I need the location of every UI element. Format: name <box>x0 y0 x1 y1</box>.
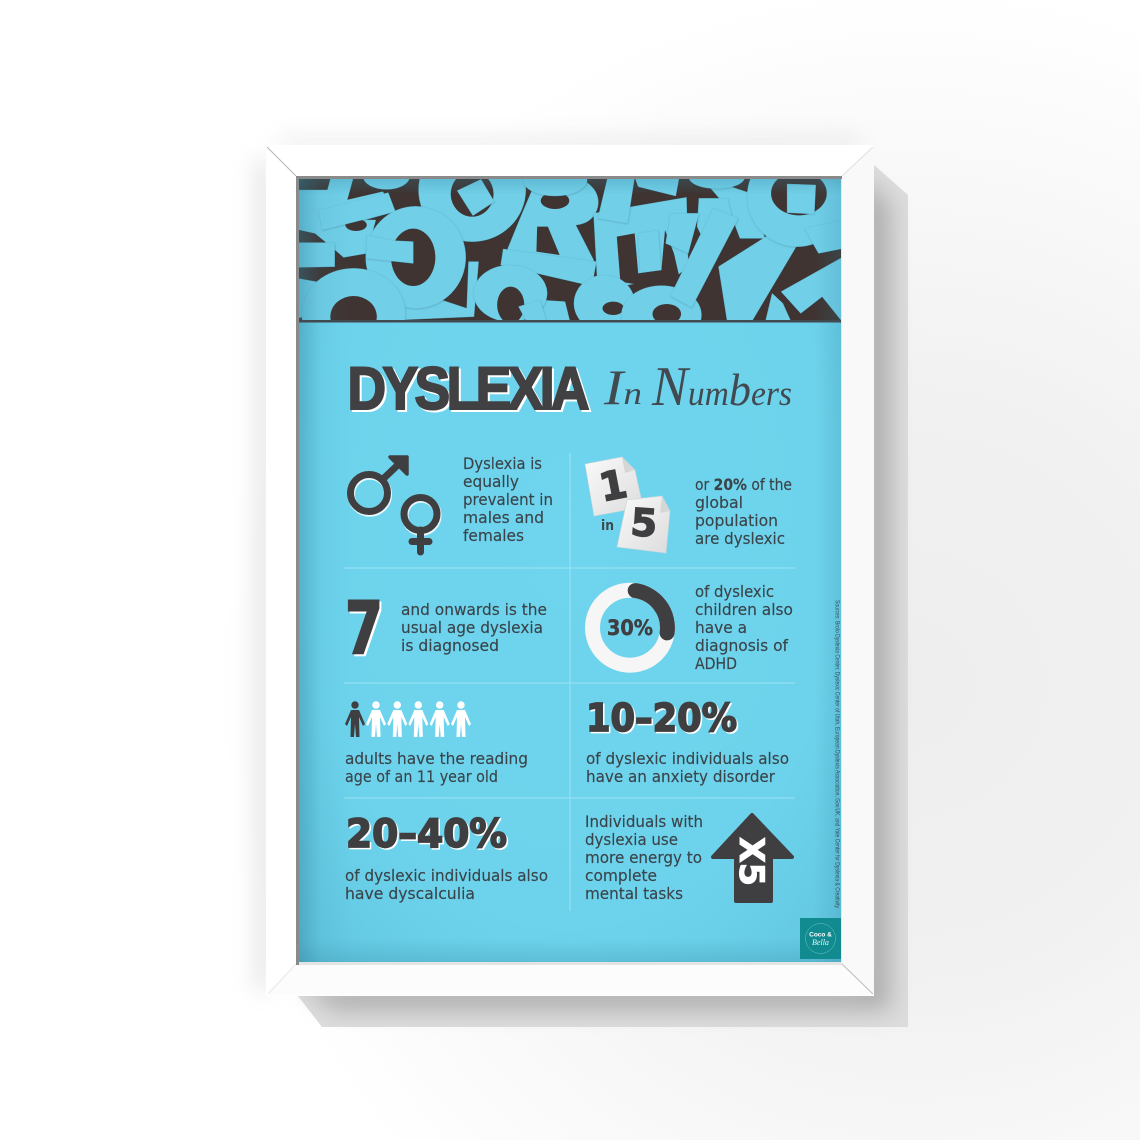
poster panel <box>299 179 841 962</box>
icon: 1 in 5 paper notes <box>585 457 670 553</box>
text: equally prevalent: females <box>463 526 524 545</box>
cell: 10-20% anxiety <box>586 696 789 786</box>
text: ADHD: have a <box>695 618 747 637</box>
text: usual age: usual age dyslexia <box>401 618 543 637</box>
text: energy: more energy to <box>585 848 702 867</box>
sources note: Sources: Brolo Dyslexia Center, Dyslexic Center of Utah, European Dyslexia Association, Gov.UK, and Yale Center for Dyslexia & Creativity <box>834 600 840 908</box>
cell: gender equality <box>350 454 553 552</box>
icon: up arrow x5 <box>713 815 792 901</box>
text: usual age <box>401 600 547 655</box>
text: energy: dyslexia use <box>585 830 678 849</box>
logo: Coco & Bella: Bella <box>812 938 829 947</box>
text: anxiety: of dyslexic individuals also <box>586 749 789 768</box>
text: anxiety: have an anxiety disorder <box>586 767 775 786</box>
text: energy: mental tasks <box>585 884 683 903</box>
text: ADHD <box>695 582 793 673</box>
text: equally prevalent: prevalent in <box>463 490 553 509</box>
text: or 20%: global <box>695 493 743 512</box>
big stat 10–20%: 10–20% <box>586 696 737 740</box>
poster edge shading <box>299 179 841 962</box>
logo: Coco & Bella: Coco & <box>809 932 832 938</box>
text: equally prevalent: males and <box>463 508 544 527</box>
text: equally prevalent: equally <box>463 472 519 491</box>
donut chart 30%: 30% <box>607 616 653 640</box>
cell: 20-40% dyscalculia <box>345 812 548 903</box>
text: ADHD: ADHD <box>695 654 737 673</box>
cell: 1 in 5 <box>585 457 792 553</box>
text: energy <box>585 812 703 903</box>
text: energy: complete <box>585 866 657 885</box>
cell: 30% ADHD <box>592 582 793 673</box>
icon: 1 in 5 paper notes: 1 <box>596 462 631 511</box>
text: anxiety <box>586 749 789 786</box>
text: dyscalculia: have dyscalculia <box>345 884 475 903</box>
big number 7: 7 <box>347 588 385 672</box>
text: ADHD: children also <box>695 600 793 619</box>
header image: paper letters <box>299 179 841 320</box>
subtitle: In Numbers: Numbers <box>651 356 792 418</box>
text: ADHD: of dyslexic <box>695 582 774 601</box>
big stat 20–40%: 20–40% <box>346 812 507 857</box>
grid dividers <box>344 453 795 911</box>
big stat 10–20%: 10–20% <box>588 698 738 742</box>
text: or 20%: are dyslexic <box>695 529 785 548</box>
icon: 1 in 5 paper notes: in <box>601 518 614 534</box>
text: ADHD: diagnosis of <box>695 636 788 655</box>
icon: six people, one dark <box>345 701 471 737</box>
subtitle: In Numbers: In <box>603 359 642 415</box>
text: reading age: adults have the reading <box>345 749 528 768</box>
text: or 20%: or 20% of the <box>695 475 792 494</box>
frame cast shadow <box>256 138 908 1027</box>
cell: age 7 <box>345 586 547 672</box>
text: equally prevalent: Dyslexia is <box>463 454 542 473</box>
cell: reading age <box>345 701 528 786</box>
icon: 1 in 5 paper notes: 5 <box>629 500 659 546</box>
title: DYSLEXIA: DYSLEXIA <box>348 356 589 423</box>
cell: energy x5 <box>585 812 792 903</box>
text: usual age: is diagnosed <box>401 636 499 655</box>
icon: up arrow x5: X5 <box>731 837 771 886</box>
text: dyscalculia: of dyslexic individuals also <box>345 866 548 885</box>
donut chart 30% <box>592 590 668 665</box>
big number 7: 7 <box>345 586 383 670</box>
text: usual age: and onwards is the <box>401 600 547 619</box>
text: reading age <box>345 749 528 786</box>
header rule <box>299 320 841 322</box>
white picture frame <box>266 145 874 996</box>
logo: Coco & Bella <box>800 918 841 959</box>
text: energy: Individuals with <box>585 812 703 831</box>
icon: male and female symbols <box>350 457 438 552</box>
text: or 20%: population <box>695 511 778 530</box>
text: reading age: age of an 11 year old <box>345 767 498 786</box>
big stat 20–40%: 20–40% <box>348 814 508 858</box>
title: DYSLEXIA: DYSLEXIA <box>350 358 591 425</box>
text: or 20% <box>695 475 792 548</box>
text: dyscalculia <box>345 866 548 903</box>
text: equally prevalent <box>463 454 553 545</box>
